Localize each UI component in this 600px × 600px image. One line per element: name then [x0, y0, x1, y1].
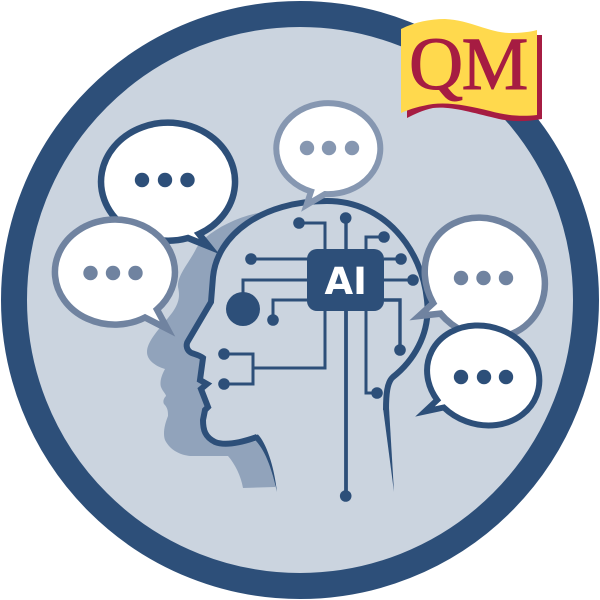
bubble shape — [276, 103, 380, 205]
dots — [454, 271, 513, 285]
shadow head silhouette — [147, 211, 300, 488]
QM wordmark: QM — [409, 23, 527, 106]
bubble shape — [425, 325, 539, 425]
bubble shape — [55, 220, 175, 329]
bubble shape — [101, 123, 235, 246]
neck back taper — [383, 408, 394, 492]
speech bubble: left slate — [55, 220, 175, 329]
flag — [401, 19, 537, 116]
speech bubble: upper left navy — [101, 123, 235, 246]
chip body — [307, 249, 384, 311]
speech bubble: right slate — [419, 218, 545, 338]
dots — [83, 266, 143, 280]
bubble shape — [419, 218, 545, 338]
dots — [454, 370, 513, 384]
main head outline — [187, 201, 428, 492]
speech bubble: lower right navy — [425, 325, 539, 425]
head fill — [187, 201, 428, 492]
AI chip — [307, 249, 384, 311]
dots — [135, 173, 195, 187]
circuit nodes — [218, 212, 419, 502]
QM logo flag — [401, 19, 542, 121]
dots — [300, 141, 359, 155]
neck front taper — [253, 434, 277, 492]
speech bubble: top light slate — [276, 103, 380, 205]
circuit traces — [224, 218, 413, 496]
chip label: AI — [324, 260, 367, 303]
flag shadow — [407, 35, 542, 121]
head stroke — [187, 201, 428, 444]
